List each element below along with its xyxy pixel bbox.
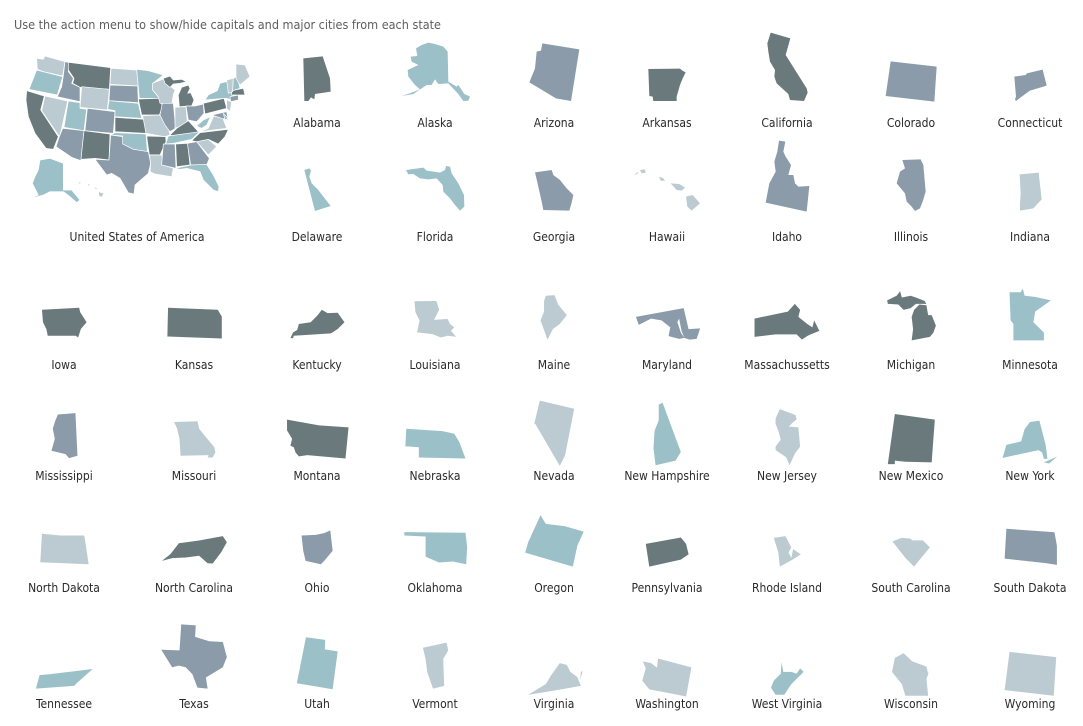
state: California: California [761, 116, 813, 130]
state: Iowa [42, 308, 87, 372]
state: Pennsylvania [632, 538, 702, 595]
state: New Hampshire: New Hampshire [624, 469, 710, 483]
state: Kansas [167, 308, 222, 372]
state: Washington: Washington [635, 697, 699, 711]
state: Vermont: Vermont [412, 697, 458, 711]
state: South Dakota: South Dakota [993, 581, 1067, 595]
state: Ohio: Ohio [305, 581, 330, 595]
state: Maine [538, 295, 571, 372]
state: Arizona: Arizona [534, 116, 574, 130]
state: Nevada [533, 401, 575, 483]
state: Virginia [528, 663, 583, 711]
state: Kansas: Kansas [175, 358, 213, 372]
state: Michigan [887, 291, 936, 372]
state: Wyoming: Wyoming [1005, 697, 1055, 711]
state: Ohio [302, 530, 333, 595]
state: Arkansas: Arkansas [642, 116, 692, 130]
state: Maine: Maine [538, 358, 571, 372]
state: Montana: Montana [293, 469, 341, 483]
map: United States of America [26, 56, 250, 244]
state: New Jersey [757, 409, 818, 483]
state: California [761, 33, 813, 130]
state: Alabama [293, 56, 341, 130]
state: Florida: Florida [417, 230, 453, 244]
state: Hawaii [634, 169, 700, 244]
state: Colorado: Colorado [887, 116, 936, 130]
state: Vermont [412, 643, 458, 711]
state: Wisconsin: Wisconsin [884, 697, 938, 711]
state: Colorado [886, 61, 937, 130]
state: New Mexico [879, 414, 944, 483]
state: Rhode Island [752, 536, 822, 595]
state: Oregon: Oregon [534, 581, 574, 595]
state: Tennessee [35, 669, 93, 711]
state: Delaware: Delaware [292, 230, 343, 244]
state: Illinois: Illinois [894, 230, 928, 244]
state: Tennessee: Tennessee [35, 697, 92, 711]
state: Idaho: Idaho [772, 230, 802, 244]
state: West Virginia [752, 662, 822, 711]
state: Massachussetts: Massachussetts [744, 358, 830, 372]
state: Arizona [529, 43, 579, 130]
state: South Dakota [993, 529, 1067, 595]
state: Maryland [636, 308, 700, 372]
state: Washington [635, 659, 699, 711]
state: Maryland: Maryland [642, 358, 692, 372]
state: North Dakota: North Dakota [28, 581, 100, 595]
state: Utah [297, 637, 338, 711]
state: Alaska [402, 43, 470, 130]
state: Indiana: Indiana [1010, 230, 1050, 244]
state: Connecticut [998, 70, 1062, 130]
state: Oregon [525, 515, 584, 595]
state: Iowa: Iowa [51, 358, 77, 372]
state: Massachussetts [744, 304, 830, 372]
state: Minnesota: Minnesota [1002, 358, 1058, 372]
state: Indiana [1010, 173, 1050, 244]
state: Texas: Texas [178, 697, 209, 711]
state: Louisiana: Louisiana [410, 358, 460, 372]
state: Georgia [533, 170, 575, 244]
state: Alaska: Alaska [417, 116, 453, 130]
state: Idaho [766, 141, 809, 244]
state: Florida [406, 166, 464, 244]
state: Nevada: Nevada [533, 469, 575, 483]
state: Wyoming [1005, 652, 1056, 711]
state: West Virginia: West Virginia [752, 697, 822, 711]
state: New Hampshire [624, 403, 710, 483]
state: South Carolina [871, 538, 951, 595]
state: Oklahoma: Oklahoma [408, 581, 462, 595]
state: Montana [287, 420, 349, 483]
state: New York [1003, 421, 1057, 483]
state: Kentucky [290, 310, 344, 372]
state: Missouri: Missouri [172, 469, 216, 483]
state: Alabama: Alabama [293, 116, 341, 130]
state: Minnesota [1002, 289, 1058, 372]
state: New Jersey: New Jersey [757, 469, 818, 483]
state: Illinois [894, 159, 928, 244]
state: Delaware [292, 168, 343, 244]
state: Kentucky: Kentucky [292, 358, 342, 372]
state: New York: New York [1005, 469, 1055, 483]
heading: instructions: Use the action menu to show/hide capitals and major cities from each state [14, 18, 441, 32]
state: Michigan: Michigan [887, 358, 935, 372]
state: Oklahoma [404, 532, 467, 595]
state: Virginia: Virginia [534, 697, 574, 711]
state: Nebraska: Nebraska [410, 469, 460, 483]
state: Louisiana [410, 301, 460, 372]
state: Nebraska [405, 429, 465, 483]
state: Mississippi [35, 413, 93, 483]
map: United States of America: United States of America [70, 230, 204, 244]
state: North Carolina: North Carolina [155, 581, 233, 595]
state: Hawaii: Hawaii [649, 230, 685, 244]
state: North Dakota [28, 534, 100, 595]
state: Texas [161, 624, 227, 711]
state: Missouri [172, 421, 216, 483]
state: Arkansas [642, 69, 692, 130]
state: Connecticut: Connecticut [998, 116, 1062, 130]
state: Utah: Utah [304, 697, 330, 711]
state: Mississippi: Mississippi [35, 469, 93, 483]
state: Georgia: Georgia [533, 230, 575, 244]
state: New Mexico: New Mexico [879, 469, 944, 483]
state: Pennsylvania: Pennsylvania [632, 581, 702, 595]
state: North Carolina [155, 536, 233, 595]
state: South Carolina: South Carolina [871, 581, 951, 595]
state: Wisconsin [884, 653, 938, 711]
state: Rhode Island: Rhode Island [752, 581, 822, 595]
